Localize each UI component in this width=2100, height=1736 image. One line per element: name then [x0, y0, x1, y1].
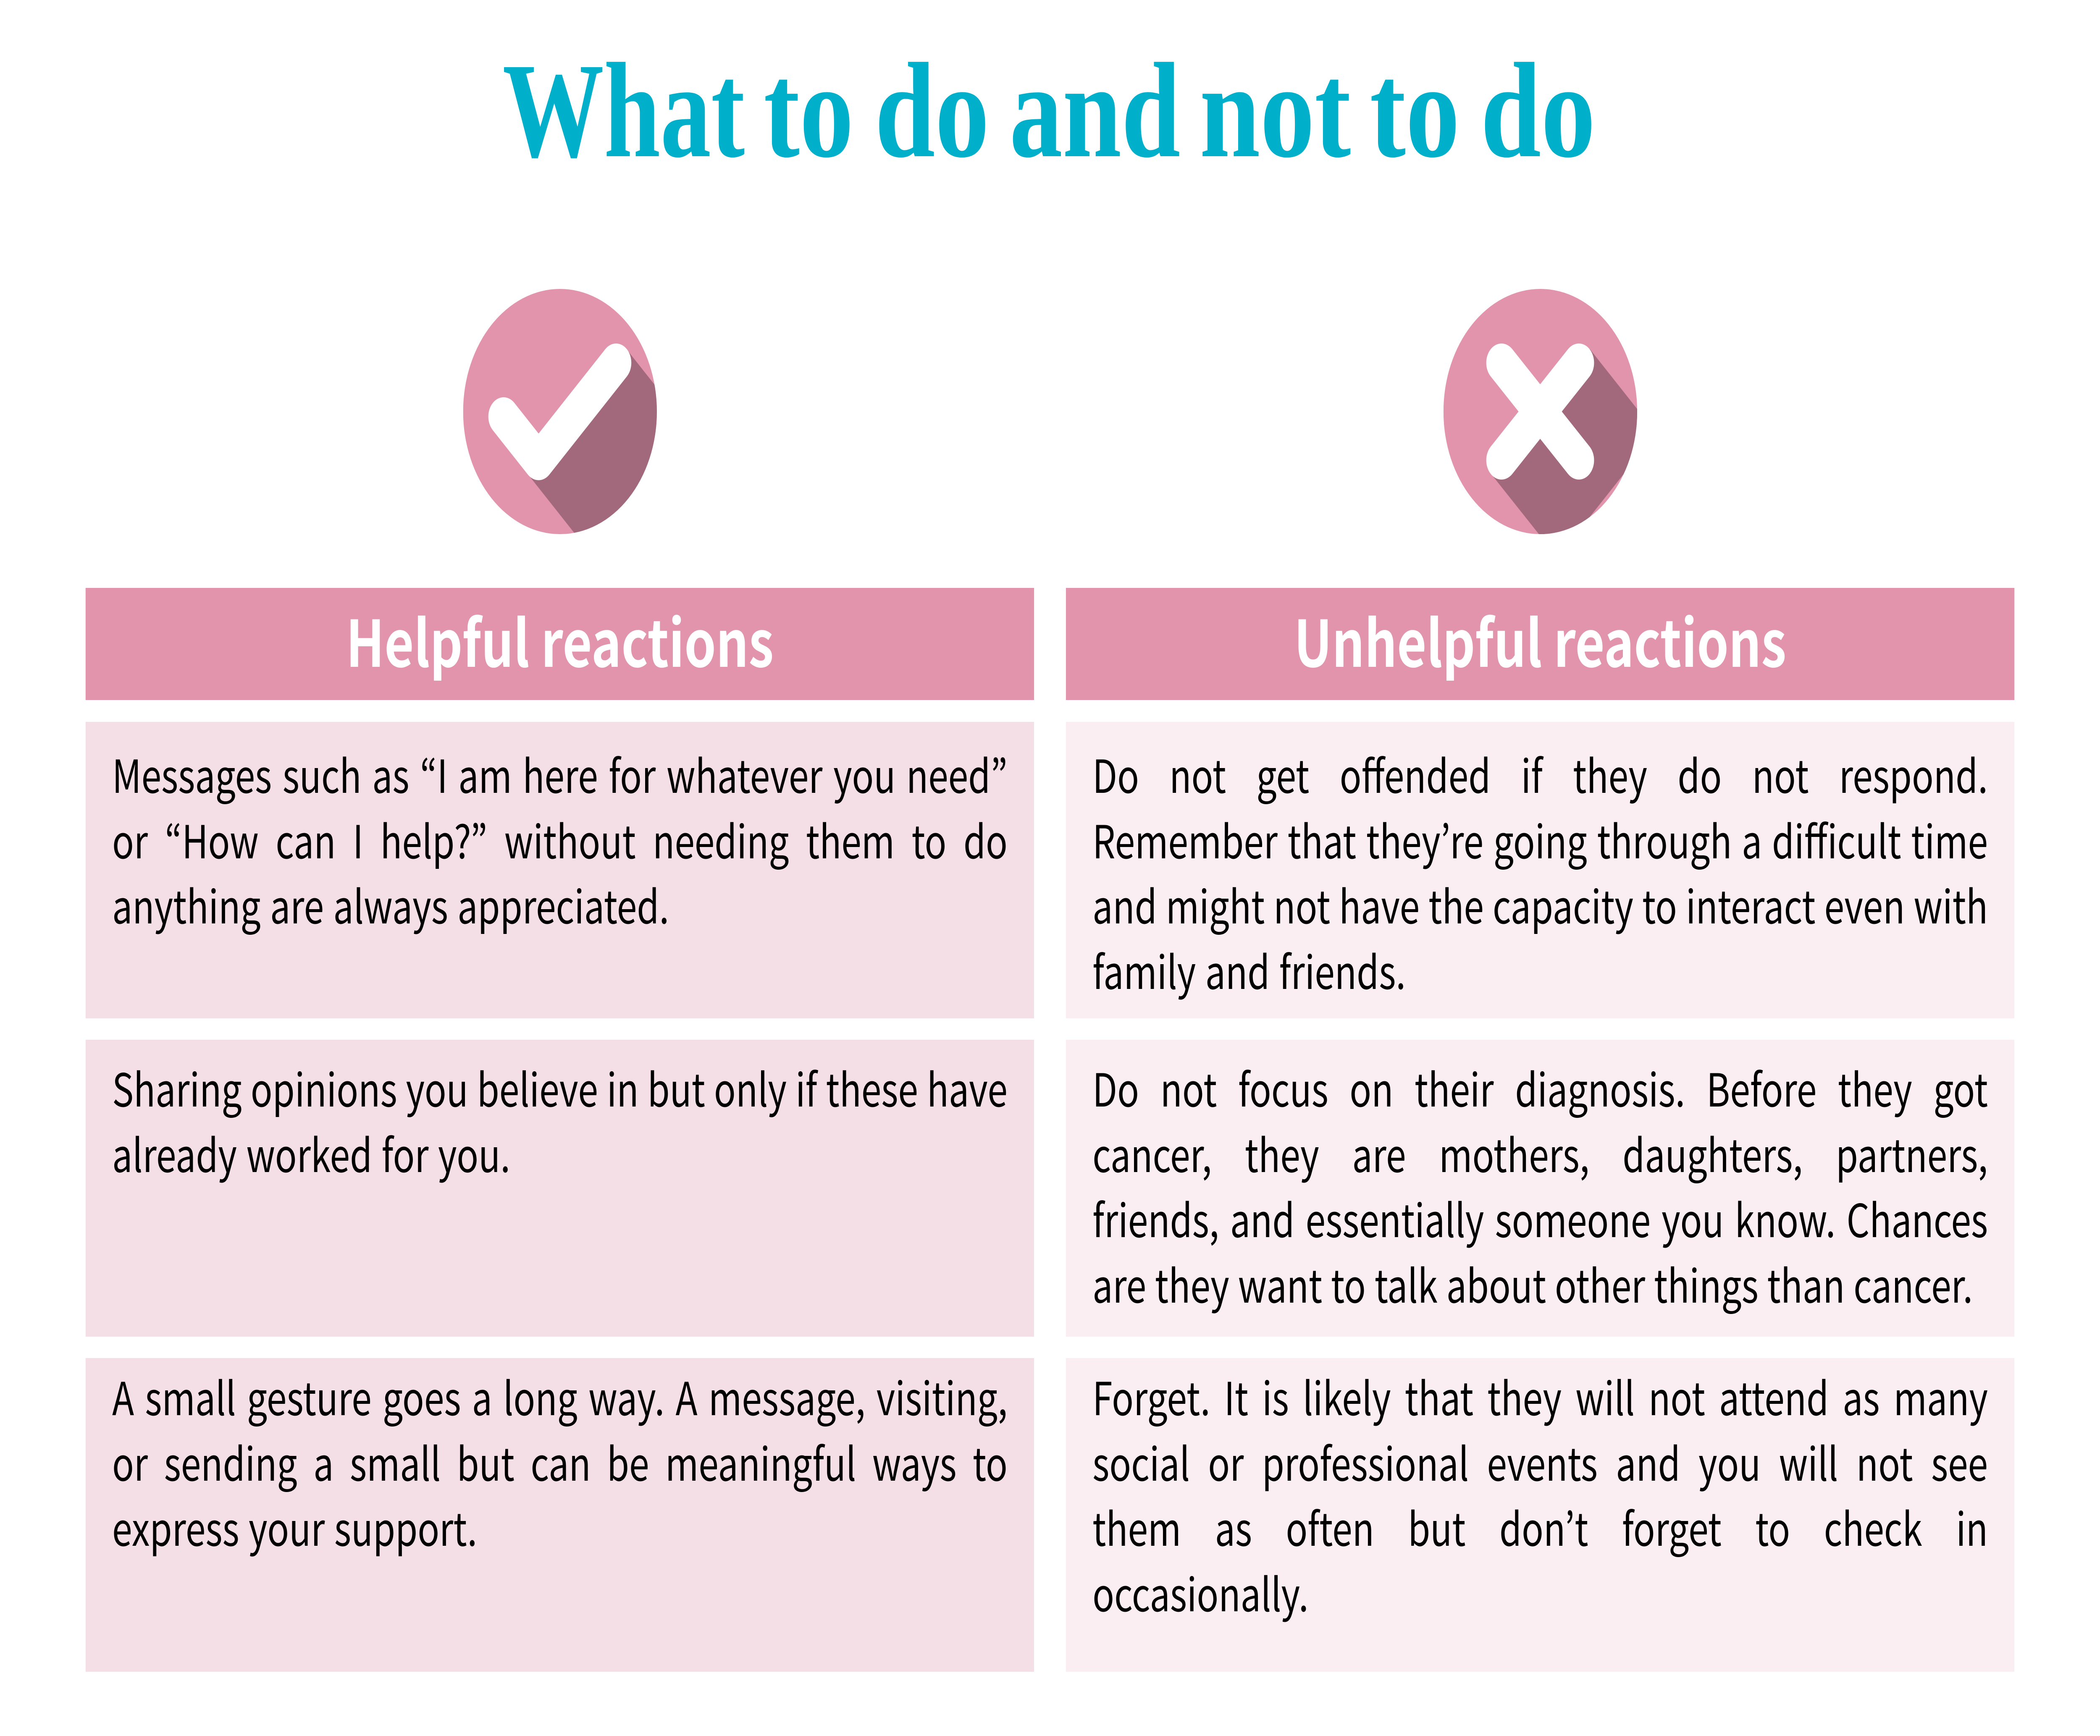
title: to	[1370, 36, 1460, 186]
text: helpful 1: or “How can I help?” without needing them to do	[112, 806, 1008, 872]
text: unhelpful 1: Remember that they’re going through a difficult time	[1092, 806, 1988, 872]
text: unhelpful 2: cancer, they are mothers, daughters, partners,	[1092, 1120, 1988, 1185]
text: unhelpful 1	[1092, 741, 1988, 1002]
text: helpful 3: or sending a small but can be meaningful ways to	[112, 1428, 1008, 1494]
text: unhelpful 3	[1092, 1363, 1988, 1625]
text: unhelpful 1: Do not get offended if they do not respond.	[1092, 740, 1988, 806]
panel: unhelpful 1	[1066, 722, 2014, 1018]
heading: Helpful reactions: Helpful reactions	[346, 593, 774, 686]
text: unhelpful 2: friends, and essentially someone you know. Chances	[1092, 1185, 1988, 1251]
heading: Helpful reactions	[86, 588, 1034, 700]
title: do	[875, 36, 989, 186]
title: and	[1010, 36, 1180, 186]
icon: cross mark	[1444, 289, 1637, 534]
title: not	[1200, 36, 1352, 186]
title: do	[1480, 36, 1596, 186]
icon: check mark	[463, 289, 657, 534]
text: unhelpful 3: social or professional events and you will not see	[1092, 1428, 1988, 1494]
heading: Unhelpful reactions: Unhelpful reactions	[1294, 593, 1786, 686]
text: helpful 1: Messages such as “I am here for whatever you need”	[112, 740, 1008, 806]
text: unhelpful 2: Do not focus on their diagnosis. Before they got	[1092, 1054, 1988, 1120]
panel: helpful 1	[86, 722, 1034, 1018]
text: helpful 1	[112, 741, 1008, 937]
title: What	[503, 36, 746, 186]
panel: helpful 2	[86, 1040, 1034, 1337]
panel: unhelpful 2	[1066, 1040, 2014, 1337]
text: unhelpful 2	[1092, 1054, 1988, 1316]
text: unhelpful 1: family and friends.	[1092, 936, 1406, 1002]
title	[465, 25, 1659, 193]
panel: unhelpful 3	[1066, 1358, 2014, 1672]
panel: helpful 3	[86, 1358, 1034, 1672]
text: helpful 3: express your support.	[112, 1493, 477, 1559]
title: to	[764, 36, 853, 186]
text: unhelpful 3: Forget. It is likely that they will not attend as many	[1092, 1363, 1988, 1429]
text: unhelpful 3: occasionally.	[1092, 1559, 1309, 1625]
text: unhelpful 3: them as often but don’t forget to check in	[1092, 1493, 1988, 1559]
text: helpful 2: Sharing opinions you believe in but only if these have	[112, 1054, 1008, 1120]
heading: Unhelpful reactions	[1066, 588, 2014, 700]
text: helpful 1: anything are always appreciated.	[112, 871, 669, 937]
text: helpful 2: already worked for you.	[112, 1120, 510, 1185]
text: helpful 3: A small gesture goes a long way. A message, visiting,	[112, 1363, 1008, 1429]
text: helpful 3	[112, 1363, 1008, 1559]
text: unhelpful 2: are they want to talk about other things than cancer.	[1092, 1250, 1973, 1316]
text: unhelpful 1: and might not have the capacity to interact even with	[1092, 871, 1988, 937]
text: helpful 2	[112, 1054, 1008, 1185]
